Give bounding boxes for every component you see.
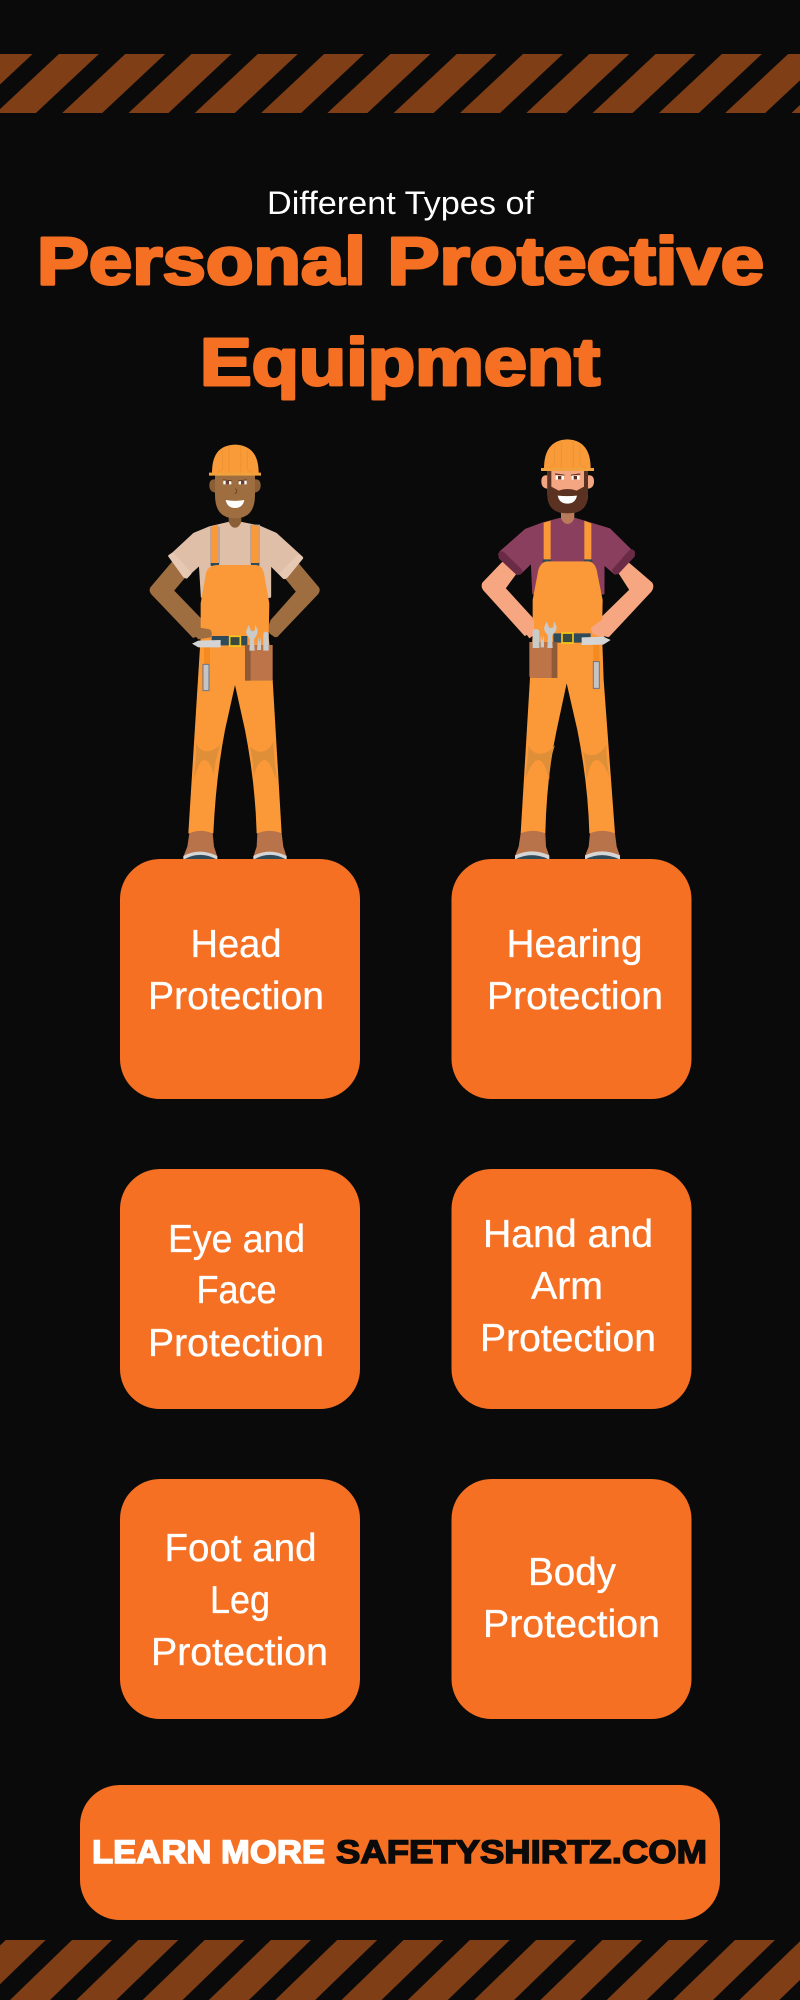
card: eye and face protection: Eye and: [168, 1218, 305, 1261]
tool belt: [212, 636, 247, 645]
card: eye and face protection: Face: [196, 1269, 276, 1312]
call to action banner: [80, 1785, 720, 1920]
card: body protection: Body: [528, 1551, 616, 1594]
card: head protection: Protection: [148, 975, 324, 1018]
tools: [246, 625, 258, 651]
smile: [558, 496, 577, 504]
card: foot and leg protection: Foot and: [164, 1527, 316, 1570]
straps: [544, 521, 591, 560]
helmet: [544, 439, 591, 469]
smile: [226, 500, 244, 508]
hands: [190, 623, 282, 639]
call to action banner: SAFETYSHIRTZ.COM: [336, 1834, 707, 1870]
arms: [151, 562, 319, 637]
card: hand and arm protection: Arm: [531, 1265, 603, 1308]
helmet: [212, 445, 259, 473]
eyes: [556, 476, 580, 480]
knee folds: [193, 742, 277, 780]
card: foot and leg protection: Protection: [151, 1631, 328, 1674]
card: hearing protection: Protection: [487, 975, 663, 1018]
hammer: [204, 647, 210, 664]
hands: [523, 619, 610, 638]
illustration: worker left: [151, 445, 319, 859]
straps: [212, 525, 259, 563]
card: eye and face protection: [120, 1169, 360, 1409]
tools: [544, 621, 557, 648]
overalls: [521, 521, 615, 833]
card: hand and arm protection: Hand and: [483, 1213, 653, 1256]
card: head protection: Head: [190, 923, 282, 966]
card: foot and leg protection: [120, 1479, 360, 1719]
arms: [483, 559, 652, 636]
card: eye and face protection: Protection: [148, 1322, 324, 1365]
top hazard stripe band: [0, 54, 800, 113]
face: [547, 470, 588, 513]
sleeve cuffs: [169, 554, 302, 578]
title: [37, 185, 764, 400]
boots: [183, 831, 287, 857]
strap shadows: [210, 525, 260, 564]
pouch: [245, 645, 273, 681]
shirt: [501, 519, 634, 593]
eyes: [223, 481, 247, 484]
face: [215, 475, 255, 518]
card: hearing protection: [452, 859, 692, 1099]
sleeve cuffs: [499, 551, 634, 574]
boots: [515, 831, 620, 856]
belt buckle: [230, 636, 240, 646]
hammer: [593, 645, 599, 662]
card: head protection: [120, 859, 360, 1099]
bottom hazard stripe band: [0, 1940, 800, 2000]
tool belt: [553, 633, 591, 643]
knee folds: [525, 745, 609, 780]
belt buckle: [562, 633, 573, 643]
shirt: [170, 523, 302, 597]
card: foot and leg protection: Leg: [210, 1579, 270, 1622]
nose: [235, 489, 237, 494]
pouch: [529, 642, 557, 678]
ears: [209, 479, 261, 493]
ears: [541, 475, 594, 489]
card: hand and arm protection: [452, 1169, 692, 1409]
main heading line 2: Equipment: [200, 325, 600, 400]
call to action banner: LEARN MORE: [92, 1834, 325, 1870]
card: body protection: Protection: [483, 1603, 660, 1646]
bib and trousers: [521, 561, 615, 833]
card: body protection: [452, 1479, 692, 1719]
neck: [229, 515, 241, 528]
bib and trousers: [188, 565, 282, 833]
beard: [547, 471, 588, 513]
neck: [561, 510, 574, 524]
main heading line 1: Personal Protective: [37, 224, 764, 299]
illustration: worker right: [483, 439, 652, 859]
overalls: [188, 525, 282, 833]
subtitle: Different Types of: [267, 185, 534, 221]
card: hearing protection: Hearing: [506, 923, 642, 966]
card: hand and arm protection: Protection: [480, 1317, 656, 1360]
